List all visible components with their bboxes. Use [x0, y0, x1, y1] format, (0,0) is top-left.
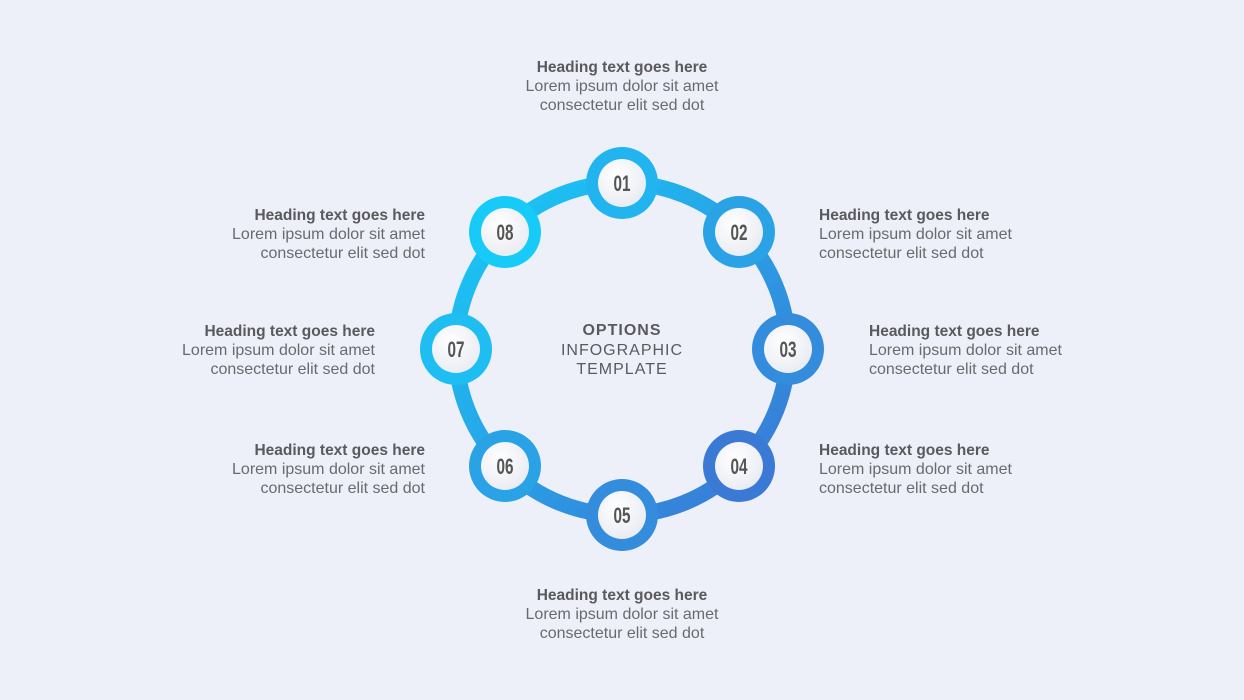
center title: OPTIONS: [582, 322, 662, 339]
text 03: consectetur elit sed dot: [869, 361, 1034, 378]
text 05: [526, 587, 719, 642]
text 06: [232, 442, 426, 497]
text 08: consectetur elit sed dot: [260, 245, 426, 262]
nodes: 01: [614, 171, 630, 196]
text 04: consectetur elit sed dot: [819, 480, 984, 497]
text 05: Lorem ipsum dolor sit amet: [526, 606, 719, 623]
text 06: consectetur elit sed dot: [260, 480, 426, 497]
nodes: 06: [496, 454, 514, 479]
ring: [456, 183, 788, 515]
text 01: [526, 59, 719, 114]
text 05: Heading text goes here: [537, 587, 708, 604]
text 01: consectetur elit sed dot: [540, 97, 705, 114]
text 02: Heading text goes here: [819, 207, 990, 224]
text 06: Heading text goes here: [254, 442, 425, 459]
nodes: 04: [730, 454, 748, 479]
text 04: Heading text goes here: [819, 442, 990, 459]
center title: [561, 322, 683, 378]
nodes: 05: [614, 503, 630, 528]
nodes: 07: [448, 337, 464, 362]
center title: TEMPLATE: [576, 361, 668, 378]
text 07: [182, 323, 376, 378]
text 02: Lorem ipsum dolor sit amet: [819, 226, 1013, 243]
text 03: Lorem ipsum dolor sit amet: [869, 342, 1063, 359]
text 07: Heading text goes here: [204, 323, 375, 340]
nodes: [420, 147, 824, 551]
center title: INFOGRAPHIC: [561, 342, 683, 359]
text 08: [232, 207, 426, 262]
text 01: Lorem ipsum dolor sit amet: [526, 78, 719, 95]
text 02: consectetur elit sed dot: [819, 245, 984, 262]
nodes: 08: [496, 220, 514, 245]
text 07: consectetur elit sed dot: [210, 361, 376, 378]
text 01: Heading text goes here: [537, 59, 708, 76]
text 04: [819, 442, 1013, 497]
text 08: Lorem ipsum dolor sit amet: [232, 226, 426, 243]
text 04: Lorem ipsum dolor sit amet: [819, 461, 1013, 478]
text 05: consectetur elit sed dot: [540, 625, 705, 642]
text 07: Lorem ipsum dolor sit amet: [182, 342, 376, 359]
nodes: 03: [780, 337, 796, 362]
text 03: [869, 323, 1063, 378]
nodes: 02: [730, 220, 748, 245]
text 06: Lorem ipsum dolor sit amet: [232, 461, 426, 478]
text 08: Heading text goes here: [254, 207, 425, 224]
text 03: Heading text goes here: [869, 323, 1040, 340]
text 02: [819, 207, 1013, 262]
